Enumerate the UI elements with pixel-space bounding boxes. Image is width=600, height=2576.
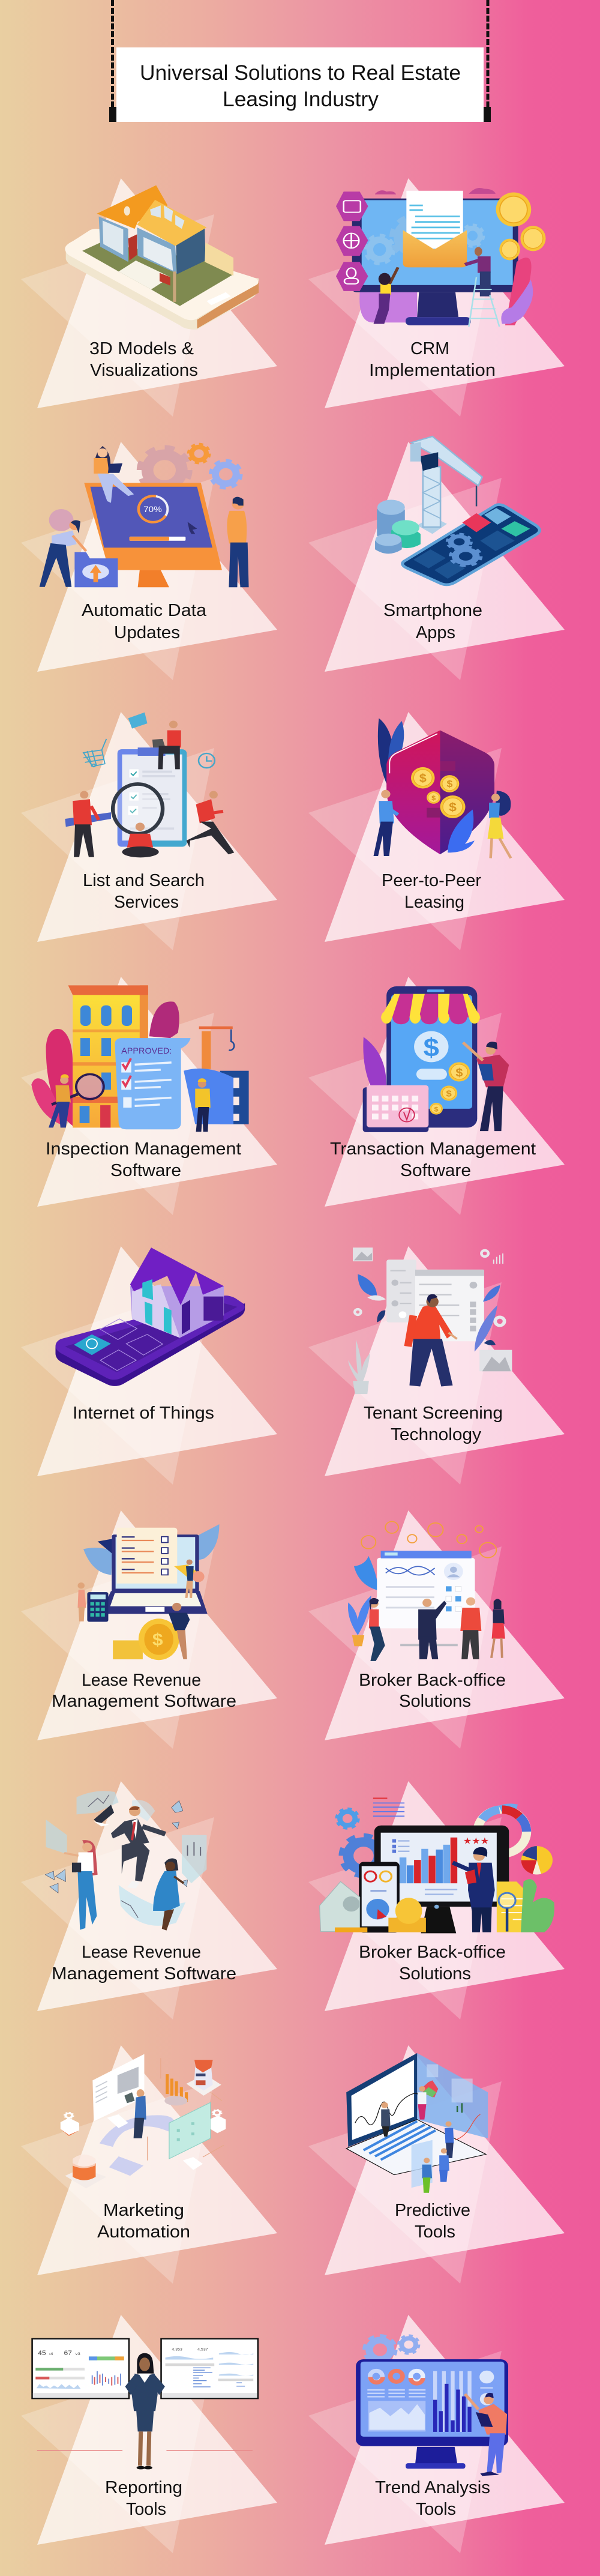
woman laptop — [369, 1598, 385, 1661]
woman — [488, 791, 511, 858]
label — [369, 339, 496, 380]
bars — [400, 1838, 457, 1883]
card: Marketing Automation — [21, 2045, 277, 2284]
big coin and stack — [113, 1618, 179, 1660]
triangle backdrop — [21, 712, 277, 950]
orange bars — [166, 2074, 188, 2102]
illustration: business people and butterflies — [45, 1791, 206, 1931]
card: 3D Models & Visualizations — [21, 178, 277, 417]
title text: Leasing Industry — [223, 88, 379, 111]
illustration: trend dashboard monitor — [356, 2336, 508, 2476]
man red — [460, 1597, 481, 1659]
left dashboard — [32, 2339, 129, 2398]
coins — [496, 193, 546, 260]
title text — [140, 61, 461, 111]
label: Peer-to-Peer — [382, 871, 481, 890]
document and magnifier — [497, 1881, 531, 1932]
donuts — [370, 2371, 423, 2383]
left dashboard: 67 — [64, 2350, 72, 2357]
approved paper — [115, 1038, 191, 1129]
person pink — [418, 2086, 427, 2120]
illustration: team at dashboard — [348, 1521, 505, 1661]
card: List and Search Services — [21, 712, 277, 950]
card: Lease Revenue Management Software (laptop) — [21, 1510, 277, 1749]
coins: $ — [455, 1066, 463, 1079]
right dashboard: 4,353 — [172, 2348, 182, 2352]
magnifier — [52, 1074, 104, 1105]
cart — [83, 739, 106, 767]
illustration: shield with coins: $ — [431, 794, 436, 802]
coins — [430, 1062, 470, 1115]
left dashboard: ‹4 — [49, 2351, 53, 2356]
teal panel — [169, 2102, 211, 2170]
glass cup — [65, 2155, 106, 2188]
hanging chains — [113, 0, 488, 108]
man presenting — [453, 1847, 495, 1932]
label: Reporting — [105, 2478, 182, 2497]
illustration: shield with coins: $ — [419, 772, 427, 785]
label: Software — [400, 1161, 471, 1180]
crane and scaffold — [199, 1028, 249, 1124]
big coin and stack: $ — [152, 1630, 163, 1650]
server — [187, 2060, 221, 2096]
title text: Universal Solutions to Real Estate — [140, 61, 461, 85]
triangle backdrop — [21, 178, 277, 417]
woman blue dress — [153, 1859, 184, 1931]
presenter woman — [125, 2353, 165, 2469]
label: 3D Models & — [89, 339, 194, 358]
pencil and person — [174, 1560, 205, 1598]
card: Reporting Tools — [21, 2315, 277, 2553]
plant — [348, 1596, 371, 1646]
illustration: phone shop — [363, 986, 509, 1132]
triangle backdrop — [308, 712, 565, 950]
label — [83, 871, 205, 912]
illustration: clipboard and search — [65, 713, 234, 857]
man sitting — [122, 822, 159, 857]
card: Internet of Things — [21, 1246, 277, 1485]
businessman — [111, 1806, 166, 1889]
woman on monitor — [94, 446, 134, 503]
man standing — [227, 497, 249, 587]
triangle backdrop — [21, 2315, 277, 2553]
label: Internet of Things — [73, 1404, 214, 1423]
label: Transaction Management — [330, 1139, 536, 1159]
runner — [187, 791, 234, 854]
man — [373, 790, 398, 856]
label — [395, 2201, 470, 2242]
checklist paper — [117, 1528, 178, 1584]
label: Broker Back-office — [359, 1943, 506, 1962]
card: Automatic Data Updates — [21, 442, 277, 680]
card: Trend Analysis Tools — [308, 2315, 565, 2553]
label — [97, 2201, 190, 2242]
plant — [521, 1879, 554, 1932]
icon hexagons — [336, 192, 368, 291]
illustration: loading monitor with people: 70% — [143, 505, 162, 514]
analyst — [465, 2393, 507, 2476]
label: Smartphone — [383, 601, 482, 620]
money — [320, 1881, 360, 1932]
illustration: crane building phone apps — [375, 436, 539, 585]
card: Broker Back-office Solutions (team) — [308, 1510, 565, 1749]
butterflies — [45, 1800, 188, 1893]
clock — [199, 753, 215, 768]
label — [359, 1943, 506, 1983]
label — [46, 1139, 241, 1180]
label: Apps — [416, 623, 455, 642]
label: Tools — [415, 2222, 455, 2242]
illustration: building inspection — [31, 985, 249, 1132]
man — [463, 1042, 509, 1131]
triangle backdrop — [21, 1510, 277, 1749]
label — [82, 601, 207, 642]
magnifier — [65, 784, 163, 834]
person at screen — [381, 2102, 391, 2137]
label — [383, 601, 482, 642]
label — [359, 1671, 506, 1711]
label — [375, 2478, 490, 2519]
triangle backdrop — [21, 977, 277, 1215]
worker left — [49, 1074, 71, 1127]
label: Marketing — [103, 2201, 184, 2220]
man on top — [152, 720, 181, 769]
label — [364, 1404, 503, 1444]
calendar — [363, 1085, 428, 1132]
triangle backdrop — [308, 442, 565, 680]
illustration: isometric marketing — [61, 2054, 226, 2188]
phone — [359, 1862, 400, 1932]
illustration: CRM monitor — [336, 188, 546, 327]
bar chart — [433, 2371, 472, 2432]
label: Software — [110, 1161, 181, 1180]
triangle backdrop — [308, 2045, 565, 2284]
label: Management Software — [52, 1692, 236, 1711]
card: Smartphone Apps — [308, 436, 565, 680]
label: Tools — [416, 2500, 456, 2519]
people group — [422, 2121, 454, 2193]
leaves — [358, 1274, 500, 1351]
card: Inspection Management Software — [21, 977, 277, 1215]
label — [52, 1943, 236, 1983]
card: Lease Revenue Management Software (people) — [21, 1781, 277, 2019]
triangle backdrop — [21, 1246, 277, 1485]
illustration: shield with coins: $ — [449, 800, 457, 814]
triangle backdrop — [21, 2045, 277, 2284]
label — [105, 2478, 182, 2519]
illustration: woman presenting dashboards — [32, 2339, 258, 2469]
triangle backdrop — [308, 977, 565, 1215]
card: Transaction Management Software — [308, 977, 565, 1215]
donuts and bars — [355, 1250, 505, 1326]
card: CRM Implementation — [308, 178, 565, 417]
man on ladder — [465, 247, 491, 297]
label: Tools — [126, 2500, 166, 2519]
chain end blocks — [109, 107, 491, 122]
folder icon — [74, 552, 118, 587]
donut chart — [478, 1808, 527, 1854]
title board — [116, 47, 484, 122]
label: Broker Back-office — [359, 1671, 506, 1690]
illustration: man with screening dashboard — [348, 1247, 512, 1394]
label — [382, 871, 481, 912]
awning — [381, 994, 480, 1024]
label: Automatic Data — [82, 601, 207, 620]
illustration: laptop checklist and coin — [77, 1524, 219, 1660]
illustration: analytics monitor — [320, 1798, 554, 1933]
triangle backdrop — [21, 442, 277, 680]
label: Predictive — [395, 2201, 470, 2220]
worker right — [195, 1078, 211, 1132]
label — [52, 1671, 236, 1711]
label: Lease Revenue — [82, 1671, 201, 1690]
triangle backdrop — [308, 1246, 565, 1485]
triangle backdrop — [21, 1781, 277, 2019]
app tiles — [462, 508, 530, 537]
label — [89, 339, 198, 380]
right dashboard: 4,537 — [197, 2348, 208, 2352]
coins — [411, 767, 466, 818]
label: Management Software — [52, 1964, 236, 1983]
card: Peer-to-Peer Leasing — [308, 712, 565, 950]
label: CRM — [410, 339, 449, 358]
man pointing — [418, 1599, 446, 1659]
triangle backdrop — [308, 1781, 565, 2019]
card: Broker Back-office Solutions (monitor) — [308, 1781, 565, 2019]
man — [408, 1294, 457, 1386]
triangle backdrop — [308, 1510, 565, 1749]
woman — [373, 267, 398, 324]
label: Tenant Screening — [364, 1404, 503, 1423]
approved paper: APPROVED: — [121, 1047, 172, 1056]
label: Solutions — [399, 1964, 471, 1983]
floating check rings — [361, 1521, 496, 1558]
data stacks — [375, 500, 421, 554]
windows — [80, 1006, 132, 1127]
label — [330, 1139, 536, 1180]
illustration: phone shop: $ — [424, 1033, 439, 1062]
label: Lease Revenue — [82, 1943, 201, 1962]
man left — [73, 791, 99, 857]
label: Services — [114, 893, 179, 912]
label: Automation — [97, 2222, 190, 2242]
woman left — [64, 1840, 98, 1930]
label: Implementation — [369, 361, 496, 380]
plant — [348, 1339, 370, 1394]
label: Solutions — [399, 1692, 471, 1711]
label: Leasing — [404, 893, 464, 912]
left dashboard: 45 — [38, 2350, 46, 2357]
coins: $ — [446, 1089, 452, 1099]
area chart — [368, 2401, 425, 2431]
triangle backdrop — [308, 178, 565, 417]
illustration: smart home on phone — [55, 1247, 245, 1386]
pie chart — [521, 1846, 553, 1875]
man with tablet — [124, 2089, 146, 2138]
gold coins — [335, 1898, 426, 1932]
gear stacks — [61, 2110, 226, 2136]
mortarboard — [94, 1805, 114, 1826]
card: Predictive Tools — [308, 2045, 565, 2284]
left dashboard: v3 — [76, 2351, 80, 2356]
stars: ★★★ — [463, 1836, 489, 1846]
illustration: shield with coins — [373, 718, 511, 858]
woman by calculator — [77, 1582, 86, 1621]
right dashboard — [161, 2339, 258, 2398]
illustration: loading monitor with people — [40, 444, 249, 587]
man with coin — [169, 1603, 190, 1659]
illustration: isometric laptop analytics — [346, 2053, 488, 2193]
title banner — [109, 0, 491, 122]
label: Trend Analysis — [375, 2478, 490, 2497]
label: Updates — [114, 623, 180, 642]
calculator — [87, 1592, 108, 1621]
label: Technology — [391, 1425, 482, 1444]
house — [130, 1247, 224, 1338]
label: Visualizations — [90, 361, 198, 380]
illustration: house on phone — [65, 186, 259, 330]
label: List and Search — [83, 871, 205, 890]
coins: $ — [434, 1105, 439, 1113]
illustration: shield with coins: $ — [446, 779, 453, 789]
woman red — [491, 1599, 505, 1658]
card: Tenant Screening Technology — [308, 1246, 565, 1485]
monitor — [374, 1826, 509, 1933]
label: Inspection Management — [46, 1139, 241, 1159]
woman with folder — [40, 520, 86, 587]
triangle backdrop — [308, 2315, 565, 2553]
